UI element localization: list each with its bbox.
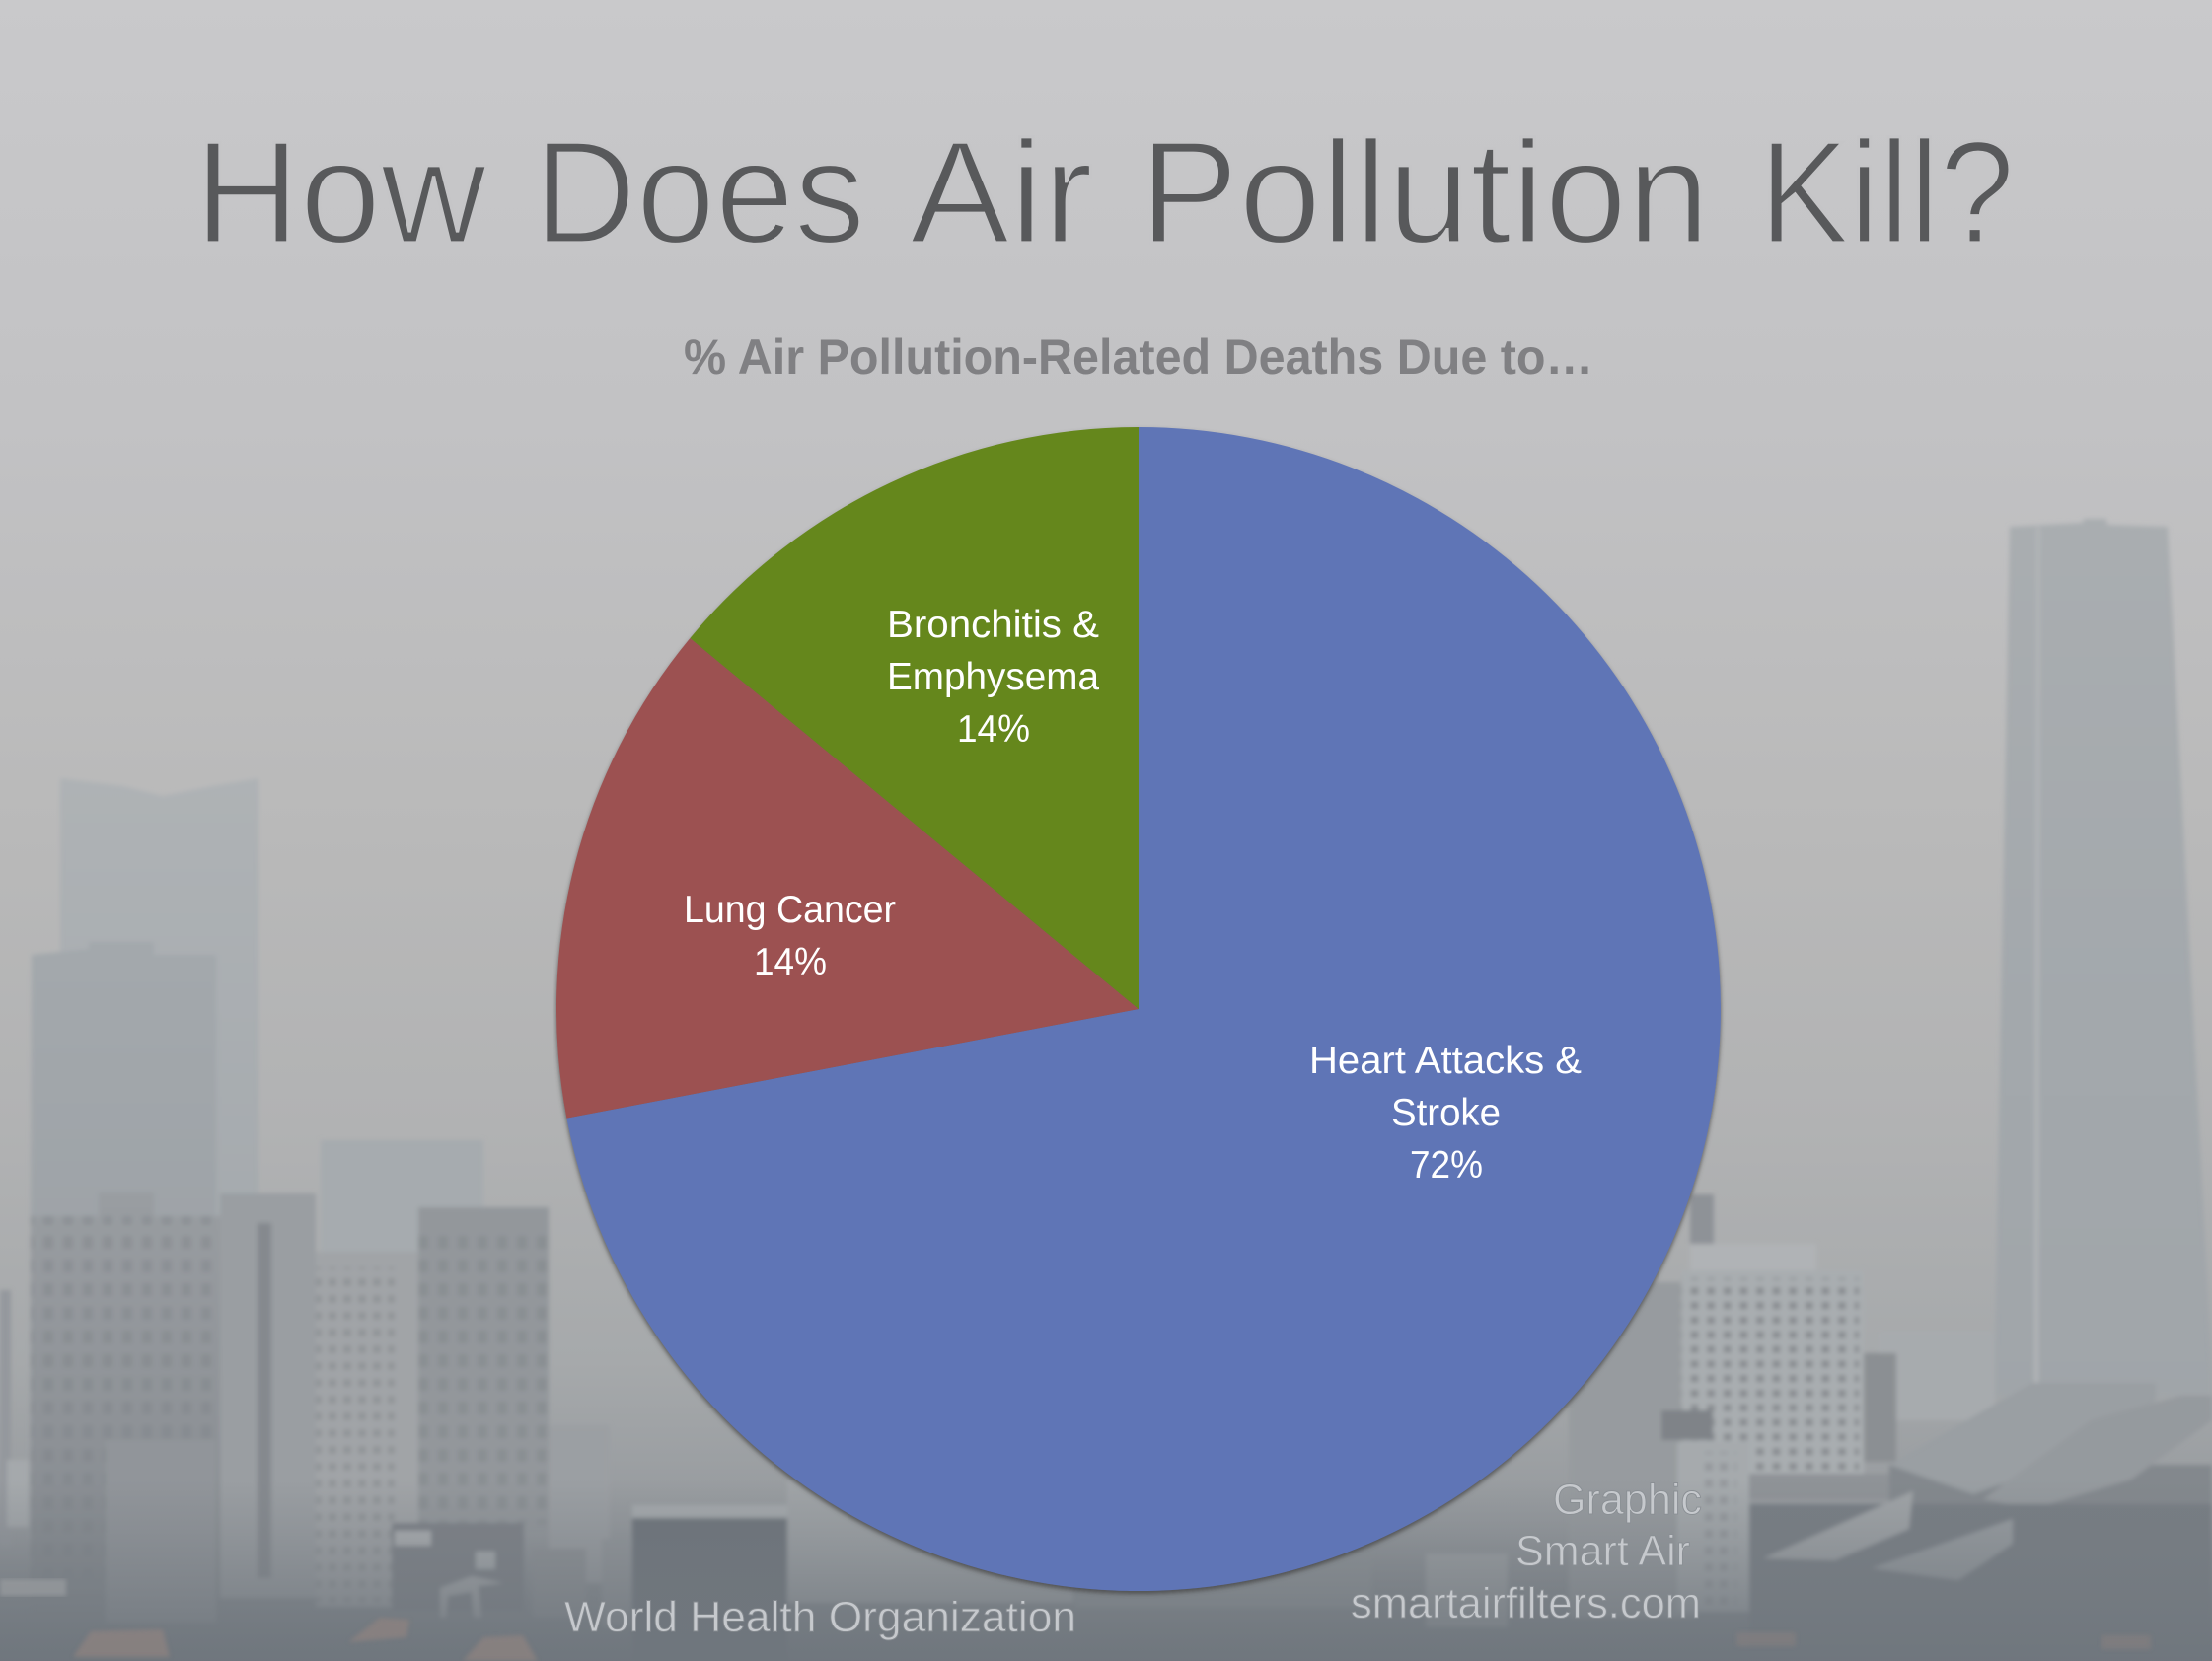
label: lung cancer bbox=[684, 889, 896, 983]
slice: heart attacks and stroke 72% bbox=[566, 427, 1721, 1591]
hotel podium bbox=[1749, 1474, 1913, 1499]
title: How bbox=[194, 111, 487, 274]
dark mid block with cap bbox=[632, 1518, 787, 1661]
left second tower bbox=[30, 942, 220, 1539]
pie chart bbox=[556, 427, 1721, 1591]
slim residential tower bbox=[220, 1193, 316, 1598]
low church block bbox=[392, 1523, 524, 1612]
right low roofs bbox=[1763, 1491, 1913, 1560]
graphic credit: smartairfilters.com bbox=[1351, 1579, 1701, 1627]
label: heart attacks and stroke bbox=[1309, 1040, 1582, 1187]
far left strip bbox=[0, 1290, 11, 1547]
label: lung cancer: Lung Cancer bbox=[684, 889, 896, 931]
slice: lung cancer 14% bbox=[556, 638, 1139, 1119]
source credit: World Health Organization bbox=[564, 1593, 1076, 1641]
right stadium roofs bbox=[1889, 1465, 2212, 1514]
small hazy block bbox=[549, 1425, 610, 1583]
title: Does bbox=[534, 111, 865, 274]
title: Pollution bbox=[1140, 111, 1710, 274]
label: bronchitis and emphysema bbox=[887, 604, 1099, 751]
background: lower haze band bbox=[0, 1480, 2212, 1661]
title: Air bbox=[910, 111, 1093, 274]
left tall rear tower bbox=[60, 778, 258, 1282]
classical building under the pie bbox=[787, 1480, 1073, 1603]
label: heart attacks and stroke: Stroke bbox=[1391, 1092, 1501, 1134]
chart subtitle: % Air Pollution-Related Deaths Due to… bbox=[684, 329, 1593, 385]
label: heart attacks and stroke: Heart Attacks & bbox=[1309, 1040, 1582, 1082]
graphic credit: Smart Air bbox=[1515, 1527, 1690, 1575]
right hotel bbox=[1690, 1244, 1816, 1273]
background: hazy city skyline bbox=[0, 519, 2212, 1661]
right rear blocks bbox=[1994, 519, 2212, 1396]
slice: bronchitis and emphysema 14% bbox=[690, 427, 1139, 1009]
graphic credit: Graphic bbox=[1553, 1476, 1702, 1524]
background: pale low roofs at left bbox=[0, 1579, 66, 1596]
dark residential tower bbox=[418, 1207, 549, 1533]
lower front block bbox=[106, 1440, 216, 1623]
label: bronchitis and emphysema: Bronchitis & bbox=[887, 604, 1099, 646]
dark office block bbox=[31, 1192, 220, 1618]
title bbox=[194, 111, 2015, 274]
label: bronchitis and emphysema: 14% bbox=[957, 708, 1030, 751]
label: lung cancer: 14% bbox=[754, 941, 827, 983]
light residential tower bbox=[316, 1252, 418, 1607]
right light foreground block bbox=[1677, 1442, 1749, 1612]
background: rooftops bbox=[73, 1618, 2151, 1661]
title: Kill? bbox=[1759, 111, 2015, 274]
label: bronchitis and emphysema: Emphysema bbox=[887, 656, 1099, 698]
rear block bbox=[321, 1140, 483, 1298]
graphic credit bbox=[1351, 1476, 1702, 1627]
right dark base bbox=[1749, 1504, 2212, 1661]
label: heart attacks and stroke: 72% bbox=[1410, 1144, 1483, 1187]
